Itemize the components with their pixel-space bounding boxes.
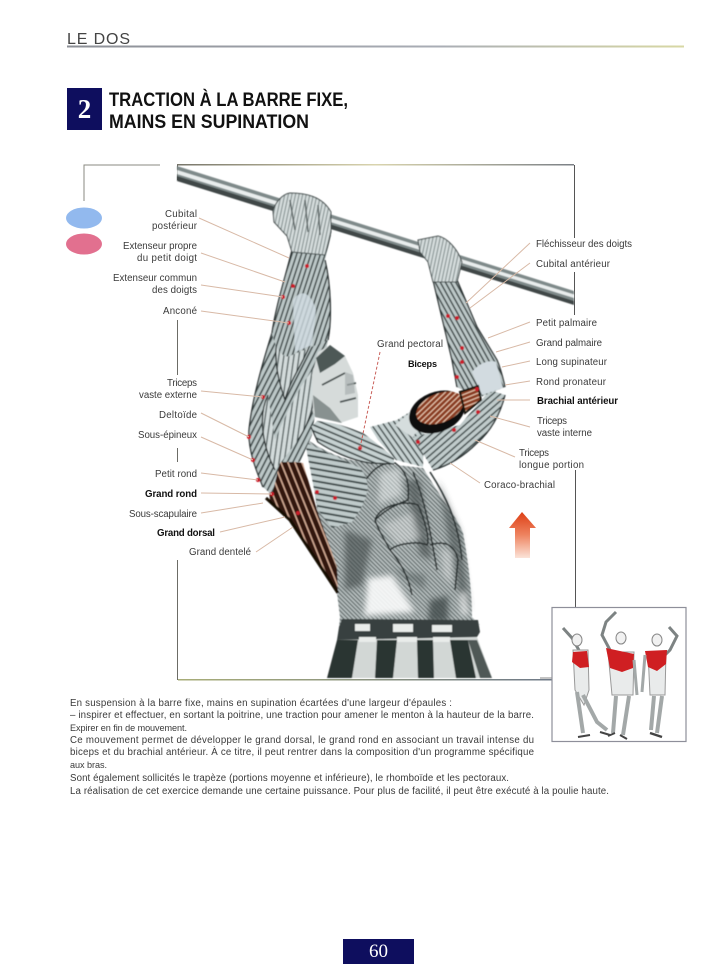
labels: left column: des doigts [152,285,197,296]
illustration: man doing chin-ups [177,166,574,678]
pull-up bar [177,166,574,304]
page number [343,939,414,964]
labels: left column: Extenseur propre [123,241,197,252]
labels: right column: Rond pronateur [536,377,607,388]
chest: right shoulder [370,410,424,467]
description text: Expirer en fin de mouvement. [70,723,187,733]
description text: Ce mouvement permet de développer le grand dorsal, le grand rond en associant un travail intense du [70,735,534,746]
left arm: deltoid bundle [262,360,320,470]
illustration frame [84,164,576,680]
labels: left column: Grand dentelé [189,547,251,558]
labels: right column: vaste interne [537,428,592,439]
left arm: triceps bundle [276,335,310,400]
torso shadows [345,480,470,622]
description text: En suspension à la barre fixe, mains en supination écartées d'une largeur d'épaules : [70,698,452,709]
labels: right column: Triceps [519,448,549,459]
section header: Le Dos: LE DOS [67,31,130,48]
legend: blue oval [66,208,102,228]
description text: biceps et du brachial antérieur. À ce titre, il peut rentrer dans la composition d'un programme spécifique [70,747,534,758]
labels: left column: Grand dorsal [157,528,215,539]
labels: centre [377,339,443,369]
legend ovals [66,208,102,254]
latissimus muscle (red) [267,460,338,593]
left arm: forearm [272,235,331,356]
labels: right column: Fléchisseur des doigts [536,239,632,250]
inset figure: front view [602,612,637,739]
inset figure: side view [563,628,610,737]
labels: left column: Sous-scapulaire [129,509,197,520]
labels: left column: Grand rond [145,489,197,500]
labels: centre: Grand pectoral [377,339,443,350]
right hand [418,236,462,282]
labels: right column: Petit palmaire [536,318,597,329]
torso highlights [364,468,469,616]
left arm: upper arm [249,333,328,495]
inset: muscles worked [540,608,686,742]
left hand [273,193,331,255]
labels: left column: Sous-épineux [138,430,197,441]
muscle marker dots [247,264,480,515]
serratus ribs [305,442,368,528]
labels: right column [484,239,632,491]
labels: left column: Extenseur commun [113,273,197,284]
labels: left column: Triceps [167,378,197,389]
title: MAINS EN SUPINATION [109,111,309,133]
leader lines [199,218,530,552]
movement arrow [509,512,536,558]
description text: Sont également sollicités le trapèze (portions moyenne et inférieure), le rhomboïde et les pectoraux. [70,773,509,784]
right arm: forearm [433,280,505,398]
labels: centre: Biceps [408,359,437,369]
labels: left column: Deltoïde [159,410,197,421]
biceps (red muscle) [403,383,471,441]
labels: left column: Anconé [163,306,197,317]
labels: left column: vaste externe [139,390,197,401]
abdominal contours [362,463,462,595]
labels: left column [113,209,251,558]
belt [337,619,480,640]
legend: pink oval [66,234,102,254]
labels: right column: Grand palmaire [536,338,602,349]
inset figure: back view [642,627,677,737]
labels: left column: du petit doigt [137,253,197,264]
labels: right column: longue portion [519,460,584,471]
title: TRACTION À LA BARRE FIXE, [109,88,348,111]
description text: La réalisation de cet exercice demande une certaine puissance. Pour plus de facilité, il peut être exécuté à la poulie haute. [70,786,609,797]
labels: right column: Triceps [537,416,567,427]
description text: – inspirer et effectuer, en sortant la poitrine, une traction pour amener le menton à la hauteur de la barre. [70,710,534,721]
labels: left column: Cubital [165,209,197,220]
labels: left column: Petit rond [155,469,197,480]
right arm: upper arm [413,390,505,470]
exercise number badge: 2 [78,94,91,124]
chest: pectoral band [311,421,394,464]
head [312,345,358,423]
description text [70,698,609,797]
labels: left column: postérieur [152,221,198,232]
labels: right column: Long supinateur [536,357,608,368]
description text: aux bras. [70,760,107,770]
page number: 60 [369,941,388,962]
shorts [327,637,492,678]
exercise number badge [67,88,102,130]
labels: right column: Brachial antérieur [537,396,618,407]
labels: right column: Cubital antérieur [536,259,611,270]
brachial anterior (red muscle) [460,386,481,413]
title [109,88,348,133]
labels: right column: Coraco-brachial [484,480,555,491]
torso [308,440,480,627]
